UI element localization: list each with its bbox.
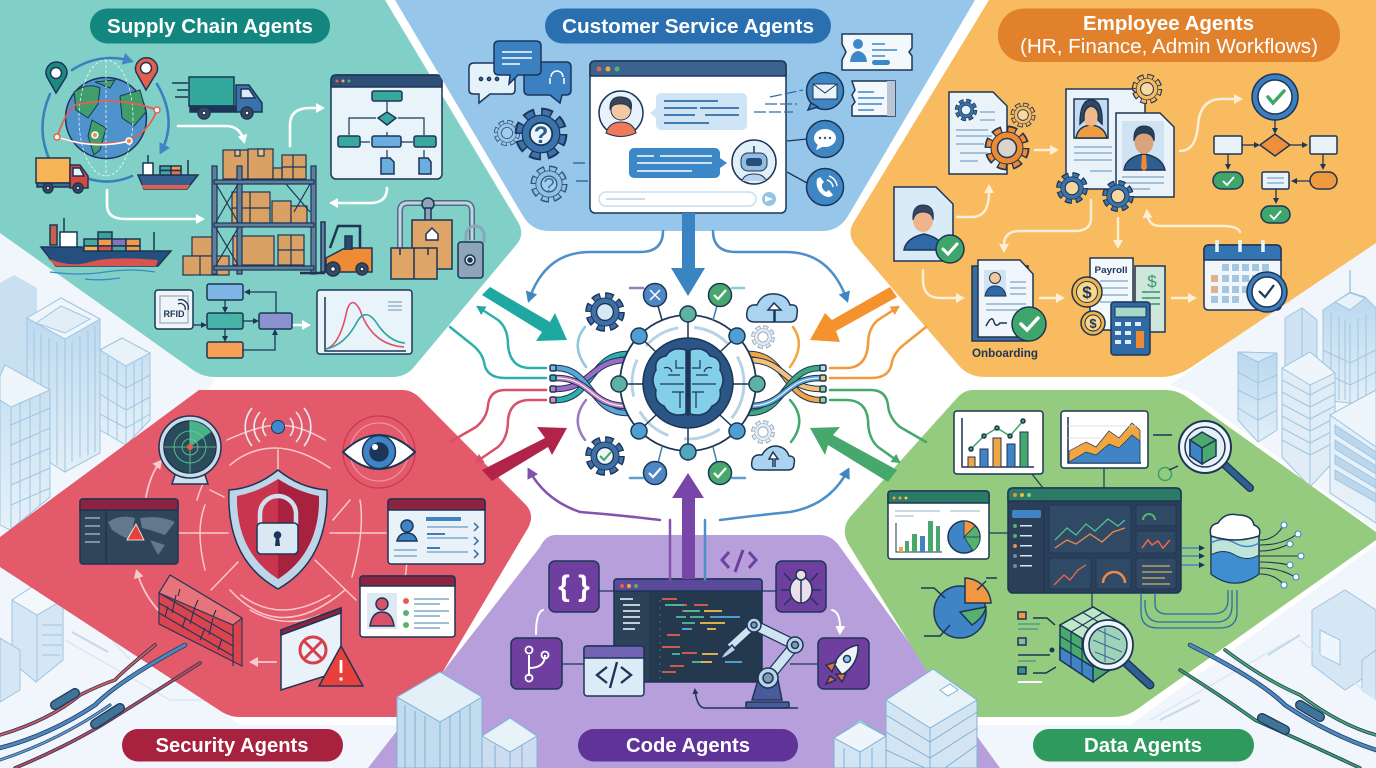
panel background green: [845, 390, 1376, 717]
workflow arrows: [536, 610, 840, 634]
bot message: [629, 148, 727, 178]
data pipes: [1141, 590, 1237, 628]
icon: eye: [343, 416, 415, 488]
icon: calendar with clock: [1204, 240, 1287, 312]
thick arrow: employee to hub: [810, 287, 897, 342]
icon: cloud upload bottom: [752, 446, 794, 470]
title: Security Agents: [122, 729, 343, 762]
icon: braces tile: [549, 561, 599, 612]
icon: small cargo ship: [138, 155, 198, 189]
icon: chat bubbles and headset: [469, 41, 571, 103]
fibre cables bottom-right: [1180, 645, 1376, 768]
thick arrow: supply chain to hub: [482, 287, 567, 341]
thick arrow: code to hub: [672, 473, 704, 579]
title: Code Agents: [578, 729, 798, 762]
thick arrow: security to hub: [482, 427, 567, 481]
icon: gear top left: [590, 297, 620, 327]
panel background red: [0, 390, 531, 717]
icon: brick firewall: [159, 575, 242, 666]
panel background teal: [0, 0, 521, 377]
panel background blue: [395, 0, 975, 231]
icon: employee gears: [1060, 78, 1158, 208]
icon: AI brain: [643, 338, 733, 428]
title pill: Employee Agents: [1083, 13, 1254, 35]
city buildings: bottom centre-left: [397, 672, 537, 768]
icon: profile window: [388, 499, 485, 564]
fibre cables bottom-left: [0, 645, 200, 768]
workflow arrows: [923, 99, 1240, 298]
icon: help gears: ?: [543, 175, 555, 197]
icon: git branch tile: [511, 638, 562, 689]
title pill: Supply Chain Agents: [107, 16, 313, 38]
panel background orange: [850, 0, 1376, 377]
panel: Employee Agents: [850, 0, 1376, 377]
icon: support ticket: [842, 34, 912, 70]
icon: RFID tag: RFID: [164, 309, 185, 319]
title: Code Agents: Code Agents: [626, 735, 750, 757]
bot avatar: [732, 140, 776, 184]
code editor monitor: [614, 579, 762, 682]
icon: container ship: [41, 218, 171, 280]
icon: rocket tile: [818, 638, 869, 689]
hub ring: [619, 314, 757, 452]
connectors: [989, 468, 1104, 607]
icon: pie chart: [921, 578, 997, 638]
icon: code window: [584, 646, 644, 696]
user message: [650, 93, 747, 130]
hub cables left: [556, 354, 627, 413]
icon: robot arm: [695, 618, 803, 708]
icon: document with gears: [949, 92, 1032, 174]
icon: radar: [159, 416, 221, 484]
cable terminals: [550, 365, 826, 403]
icon: payroll documents with calculator: $: [1147, 272, 1157, 291]
icon: profile document man: [1116, 113, 1174, 197]
icon: braces tile: { }: [558, 570, 590, 603]
area chart card: [1061, 411, 1148, 468]
icon: clock with check: [1252, 74, 1298, 120]
title pill: (HR, Finance, Admin Workflows): [1020, 36, 1318, 58]
channel connectors: [754, 90, 807, 183]
icon: cloud upload top: [747, 294, 797, 322]
icon: network node blue: [644, 284, 666, 320]
icon: data lake cloud cylinder: [1210, 514, 1260, 583]
city buildings: bottom centre-right: [834, 669, 977, 768]
panel: Data Agents: [845, 390, 1376, 717]
icon: phone: [806, 168, 844, 206]
city buildings: left side: [0, 275, 150, 702]
hub nodes: [611, 306, 765, 460]
dashed connector lines left: [573, 163, 622, 181]
title pill: [545, 8, 831, 44]
title: Data Agents: Data Agents: [1084, 735, 1202, 757]
panel: Supply Chain Agents: [0, 0, 521, 377]
icon: shield with padlock: [229, 470, 327, 589]
icon: user access window: [360, 576, 455, 637]
icon: ticket with list: [852, 81, 895, 116]
small connection arrows: [578, 288, 799, 478]
icon: magnifier and 3D cube: [1153, 421, 1250, 488]
RFID process flow: [193, 284, 292, 358]
icon: check green bottom: [708, 447, 732, 484]
panel: Customer Service Agents: [395, 0, 975, 231]
icon: orange forklift: [300, 222, 372, 276]
icon: line chart window: [317, 290, 412, 354]
panel: Security Agents: [0, 390, 531, 717]
icon: profile document woman: [1066, 89, 1145, 189]
icon: data cube with magnifier: [1060, 607, 1150, 685]
icon: globe with orbit arrows and pins: [42, 58, 169, 182]
icon: RFID tag: [155, 290, 193, 329]
code lines: [620, 599, 742, 680]
pale city ground right: [960, 235, 1376, 768]
icon: help gears: ?: [534, 122, 548, 149]
workflow arrows: [107, 108, 387, 325]
title pill: Customer Service Agents: [562, 16, 814, 38]
shield connection rings: [178, 425, 409, 621]
panel: Code Agents: [368, 535, 1000, 768]
dashboard sidebar: [1013, 524, 1032, 568]
icon: bug tile: [776, 561, 826, 612]
chat window: [590, 61, 786, 213]
city streets: left: [65, 600, 240, 700]
user avatar: [599, 91, 643, 136]
thick arrow: customer service to hub: [671, 213, 705, 296]
icon: teal delivery truck: [172, 77, 262, 119]
satellite icons around hub: [578, 284, 799, 484]
icon: boxes, pipe and padlock: [391, 198, 484, 279]
label: onboarding: Onboarding: [972, 346, 1038, 360]
title: Data Agents: [1033, 729, 1254, 762]
icon: check blue bottom: [644, 447, 666, 484]
icon: code tag: [722, 550, 756, 572]
title pill: [998, 8, 1340, 62]
icon: payroll documents with calculator: Payroll: [1094, 265, 1128, 275]
hub cables right: [749, 354, 820, 413]
main analytics dashboard: [1008, 488, 1181, 593]
faint cogs: [754, 328, 772, 441]
connectors: [562, 591, 818, 664]
city buildings: right side: [1238, 270, 1376, 700]
thin flow lines: [450, 231, 926, 579]
icon: data list: [1018, 612, 1056, 682]
thick arrow: data to hub: [810, 427, 897, 482]
icon: blocked window with warning: [281, 608, 363, 690]
central AI hub: [550, 306, 826, 460]
dashboard widgets: [1049, 505, 1176, 589]
city streets: right: [1150, 635, 1376, 720]
icon: red delivery truck: [36, 158, 88, 193]
bar chart card: [954, 411, 1043, 474]
icon: payroll documents with calculator: [1072, 258, 1165, 355]
icon: help gears: [497, 114, 563, 198]
icon: warehouse shelving with boxes: [183, 149, 316, 275]
title pill: [90, 8, 330, 44]
icon: payroll documents with calculator: $: [1082, 283, 1092, 302]
icon: chat: [806, 120, 844, 158]
icon: onboarding document: [972, 260, 1046, 341]
report window: [888, 491, 989, 559]
arrows into data lake: [1182, 548, 1203, 565]
approval workflow: [1213, 120, 1337, 223]
panel background purple: [368, 535, 1000, 768]
title: Security Agents: Security Agents: [156, 735, 308, 757]
input box: [599, 192, 776, 206]
icon: flowchart window: [331, 75, 442, 179]
icon: email: [806, 72, 844, 110]
circular arrows: [137, 462, 276, 662]
icon: check green top: [708, 284, 732, 320]
icon: threat map window: [80, 499, 178, 564]
data lake outlets: [1260, 522, 1304, 588]
icon: employee file with check: [894, 187, 964, 263]
icon: signal waves: [245, 408, 311, 446]
pale city ground left: [0, 225, 420, 768]
icon: gear bottom left with check: [590, 441, 620, 471]
icon: payroll documents with calculator: $: [1089, 316, 1097, 331]
